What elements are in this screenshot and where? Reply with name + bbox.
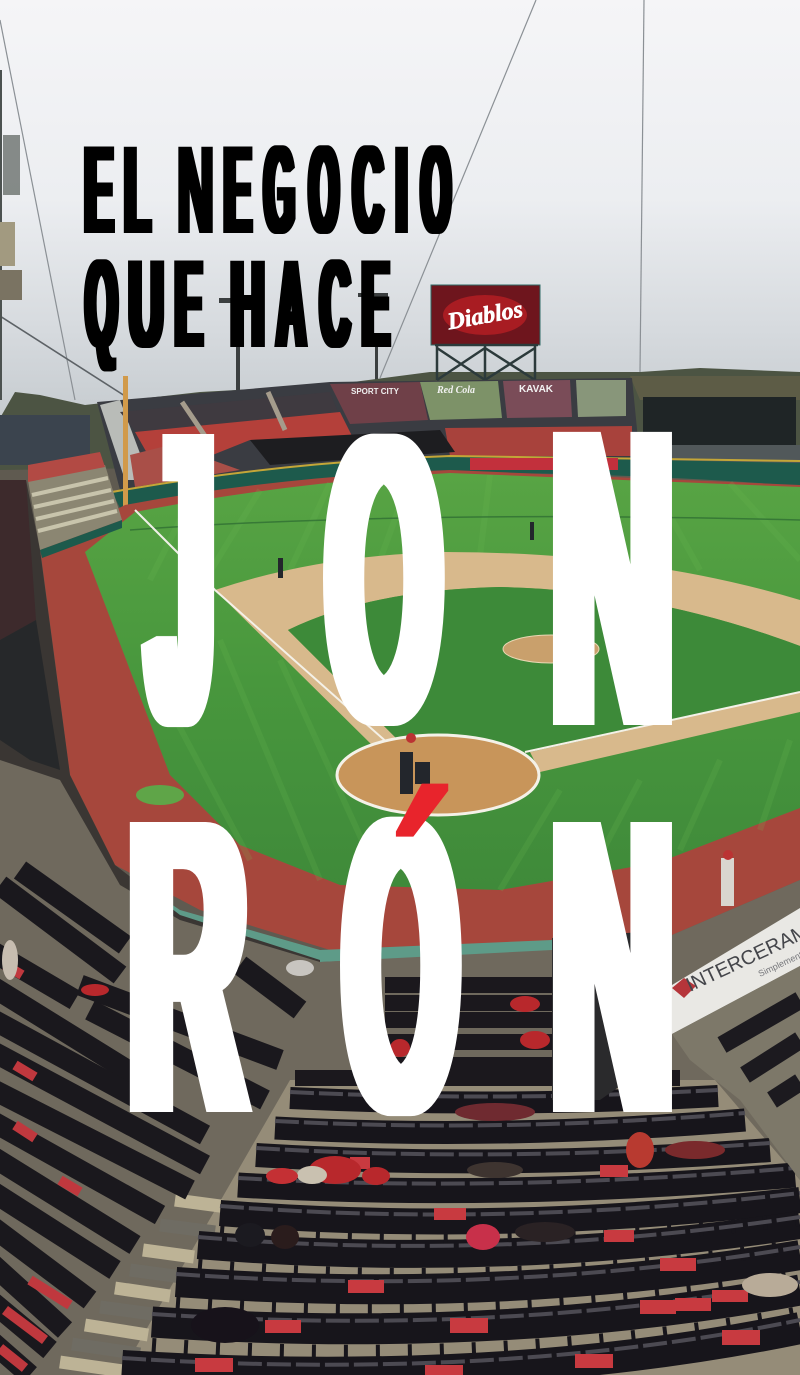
- banner logo: [672, 978, 696, 998]
- heading line 1: [84, 119, 451, 260]
- heading line 1: O: [309, 119, 339, 260]
- seat dividers below rows: [152, 1219, 800, 1352]
- heading line 1: C: [353, 120, 383, 260]
- red seats: [195, 1157, 760, 1375]
- heading line 2: [86, 234, 389, 375]
- heading: EL NEGOCIO QUE HACE: [84, 119, 451, 375]
- heading line 2: letter H: H: [231, 236, 265, 375]
- scoreboard logo: Diablos: [445, 297, 525, 336]
- sponsor banner: [672, 908, 800, 1034]
- grandstand: Red Cola: [436, 385, 475, 396]
- infield dirt: [215, 552, 800, 745]
- aisle steps: [60, 1200, 235, 1372]
- seat highlights: [122, 1090, 800, 1365]
- heading line 1: O: [421, 119, 451, 260]
- upper center seat rows: [295, 985, 680, 1078]
- left red seats: [0, 965, 80, 1368]
- headline: RÓN: R: [129, 730, 246, 1202]
- scoreboard: [431, 285, 540, 380]
- dugout wall: [552, 930, 672, 1100]
- sky: [0, 0, 800, 440]
- headline: RÓN: O: [344, 730, 458, 1203]
- right seats and aisle: [672, 966, 800, 1180]
- heading line 2: E: [175, 234, 202, 374]
- headline: JON: [149, 340, 673, 816]
- home plate circle: [337, 735, 539, 815]
- light steps: [60, 1200, 235, 1372]
- headline: JON: O: [327, 347, 441, 810]
- heading line 1: L: [124, 120, 150, 260]
- heading line 1: G: [264, 120, 294, 260]
- headline: JON: J: [149, 345, 212, 813]
- light towers at left: [0, 70, 22, 400]
- infield grass shade: [288, 587, 800, 755]
- left seat rows: [0, 870, 300, 1375]
- dark outfield screen: [643, 397, 796, 450]
- on-deck circle: [136, 785, 184, 805]
- left stands: [0, 480, 320, 1375]
- headline: JON: N: [552, 340, 673, 816]
- headline: RÓN: N: [552, 731, 673, 1203]
- lower concourse floor: [0, 760, 800, 1375]
- dark wall at left: [0, 415, 90, 465]
- outfield wall: [112, 456, 800, 518]
- upper spectators: [2, 940, 550, 1057]
- center seat rows: [122, 1096, 800, 1373]
- red accent over O: ´: [387, 725, 457, 1105]
- heading line 2: Q: [86, 234, 117, 374]
- foul pole: [123, 376, 128, 506]
- spectators center: [191, 1103, 798, 1343]
- heading line 2: U: [129, 235, 164, 375]
- heading line 1: E: [84, 119, 113, 260]
- center block floor: [120, 1080, 800, 1375]
- mowing stripes: [150, 475, 800, 890]
- foul territory track: [40, 470, 800, 950]
- billboards: [330, 382, 428, 424]
- left field stairs: [28, 452, 122, 558]
- teal lower wall: [50, 760, 552, 962]
- headline: RÓN: [129, 730, 673, 1203]
- heading line 2: A: [277, 234, 306, 374]
- distant trees: [0, 368, 800, 470]
- grandstand: KAVAK: [519, 384, 554, 395]
- dark steps: [72, 1225, 215, 1354]
- pitcher mound: [503, 635, 599, 663]
- heading line 1: letter N: N: [178, 121, 214, 261]
- grass field: [85, 473, 800, 890]
- heading line 2: E: [362, 234, 389, 374]
- support cables: [0, 0, 644, 400]
- heading line 1: I: [396, 120, 407, 260]
- baseline first base: [530, 692, 800, 772]
- grandstand: SPORT CITY: [351, 387, 400, 396]
- light poles: [219, 293, 388, 390]
- players: [278, 522, 734, 906]
- base ground: [0, 430, 800, 1375]
- heading line 2: C: [320, 234, 350, 374]
- grandstand: [97, 378, 640, 490]
- heading line 1: E: [224, 120, 251, 260]
